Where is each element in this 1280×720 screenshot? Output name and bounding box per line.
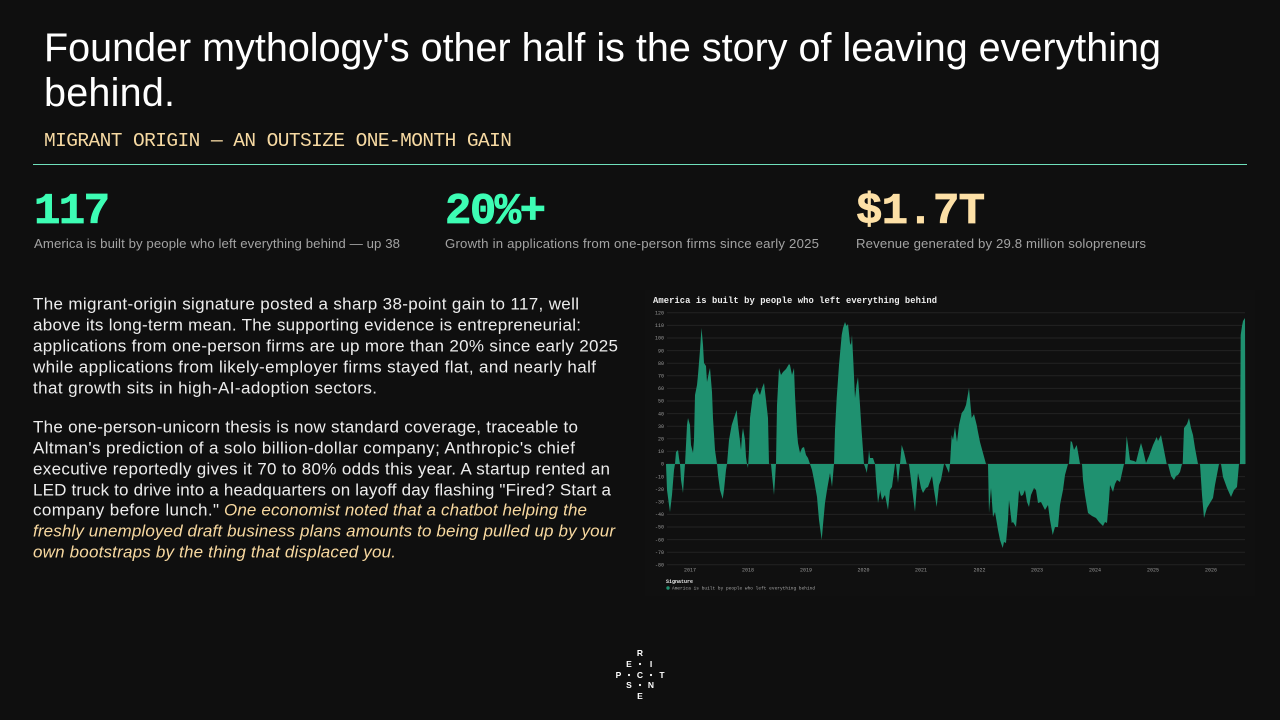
stat: 20%+: 20%+ — [445, 187, 546, 237]
chart legend — [666, 579, 815, 592]
logo: letter mark: E — [637, 691, 643, 701]
paragraph 2: executive reportedly gives it 70 to 80% odds this year. A startup rented an — [33, 460, 610, 478]
paragraph 1: above its long-term mean. The supporting evidence is entrepreneurial: — [33, 316, 581, 334]
stat: 117: 117 — [34, 187, 110, 237]
y axis labels: -40 — [655, 512, 664, 518]
logo: letter mark: E — [626, 659, 632, 669]
logo: letter mark: S — [626, 680, 632, 690]
logo: letter mark: R — [637, 648, 643, 658]
y axis labels: 30 — [658, 424, 664, 430]
y axis labels: -50 — [655, 525, 664, 531]
paragraph 1: while applications from likely-employer firms stayed flat, and nearly half — [32, 358, 596, 376]
y axis labels: 100 — [655, 336, 664, 342]
x axis labels: 2021 — [915, 568, 927, 574]
title: Founder mythology's other half is the story of leaving everything — [44, 26, 1161, 70]
stat: $1.7T: $1.7T — [856, 187, 985, 237]
paragraph 2: The one-person-unicorn thesis is now standard coverage, traceable to — [33, 418, 578, 436]
logo: letter mark: C — [637, 670, 643, 680]
y axis labels: 20 — [658, 436, 664, 442]
stat: 117 — [34, 187, 400, 251]
y axis labels: 50 — [658, 399, 664, 405]
logo: letter mark: P — [616, 670, 622, 680]
chart legend: Signature — [666, 579, 693, 585]
x axis labels: 2018 — [742, 568, 754, 574]
stat: 117: America is built by people who left everything behind — up 38 — [34, 236, 400, 251]
chart legend: America is built by people who left everything behind — [672, 586, 815, 592]
stat: $1.7T: Revenue generated by 29.8 million solopreneurs — [856, 236, 1146, 251]
x axis labels — [684, 568, 1217, 574]
paragraph 2: freshly unemployed draft business plans amounts to being pulled up by your — [33, 522, 616, 540]
paragraph 2: One economist noted that a chatbot helping the — [224, 500, 587, 520]
y axis labels: -70 — [655, 550, 664, 556]
paragraph 1: applications from one-person firms are up more than 20% since early 2025 — [33, 336, 618, 356]
logo: letter mark: I — [650, 659, 652, 669]
paragraph 2: own bootstraps by the thing that displaced you. — [33, 542, 396, 562]
y axis labels: 10 — [658, 449, 664, 455]
y axis labels: 0 — [661, 462, 664, 468]
x axis labels: 2019 — [800, 568, 812, 574]
stat: $1.7T — [856, 187, 1146, 251]
x axis labels: 2022 — [973, 568, 986, 574]
subtitle: MIGRANT ORIGIN — AN OUTSIZE ONE-MONTH GAIN — [44, 130, 512, 152]
chart: signature area chart — [645, 290, 1255, 596]
y axis labels: -20 — [655, 487, 664, 493]
y axis labels: -60 — [655, 537, 664, 543]
stat: 20%+: Growth in applications from one-person firms since early 2025 — [445, 236, 819, 251]
y axis labels: -30 — [655, 500, 664, 506]
x axis labels: 2025 — [1147, 568, 1159, 574]
x axis labels: 2026 — [1205, 568, 1217, 574]
y axis labels: 60 — [658, 386, 664, 392]
paragraph 2: company before lunch." — [33, 500, 219, 520]
paragraph 2: Altman's prediction of a solo billion-dollar company; Anthropic's chief — [33, 438, 575, 458]
title — [44, 26, 1161, 115]
title: behind. — [44, 71, 175, 115]
paragraph 2 — [33, 418, 616, 562]
area series — [666, 318, 1246, 548]
stat: 20%+ — [445, 187, 819, 251]
logo: letter mark: T — [659, 670, 665, 680]
y axis labels: 120 — [655, 310, 664, 316]
logo: letter mark — [616, 648, 665, 701]
y axis labels — [655, 310, 664, 568]
y axis labels: 110 — [655, 323, 664, 329]
y axis labels: 80 — [658, 361, 664, 367]
x axis labels: 2023 — [1031, 568, 1043, 574]
y axis labels: -10 — [655, 474, 664, 480]
logo: letter mark: N — [648, 680, 654, 690]
y axis labels: -80 — [655, 562, 664, 568]
paragraph 1: The migrant-origin signature posted a sharp 38-point gain to 117, well — [33, 294, 579, 314]
chart title: America is built by people who left everything behind — [653, 296, 937, 306]
y axis labels: 90 — [658, 348, 664, 354]
y axis labels: 70 — [658, 374, 664, 380]
x axis labels: 2020 — [857, 568, 870, 574]
x axis labels: 2017 — [684, 568, 696, 574]
paragraph 2: LED truck to drive into a headquarters on layoff day flashing "Fired? Start a — [33, 480, 612, 500]
paragraph 1 — [32, 294, 618, 398]
y axis labels: 40 — [658, 411, 664, 417]
paragraph 1: that growth sits in high-AI-adoption sectors. — [33, 378, 377, 398]
x axis labels: 2024 — [1089, 568, 1101, 574]
